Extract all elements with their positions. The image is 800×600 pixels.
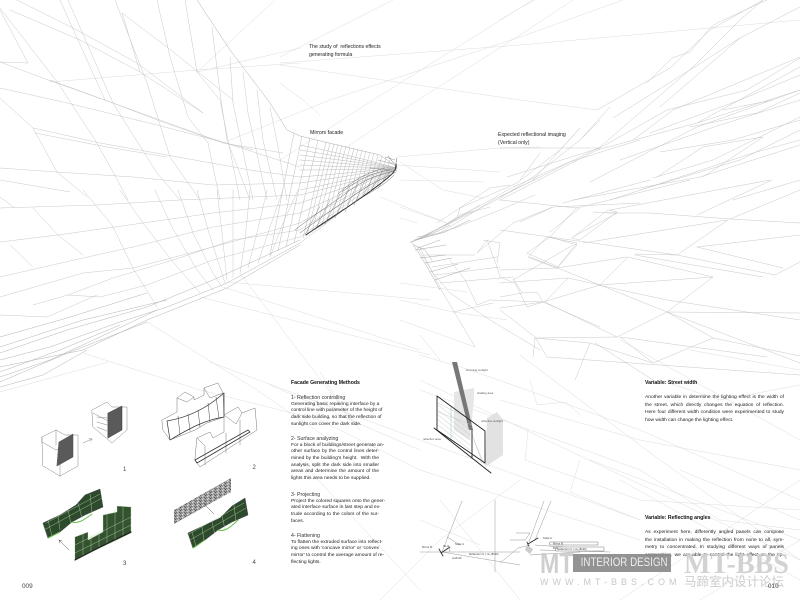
label: expected imaging: (Vertical only) xyxy=(498,140,529,146)
text: reflecting angles: the installation in making the reflection from none to all, sym- xyxy=(645,538,784,543)
heading: facade generating methods: Facade Generating Methods xyxy=(291,380,360,386)
reflecting angle diagram: 90-A xyxy=(443,544,449,548)
reflecting angle diagram: Reflection C = A+(B-90) xyxy=(469,552,499,556)
text: step 3 xyxy=(291,498,386,524)
text: step 4 xyxy=(291,540,384,565)
text: reflecting angles xyxy=(645,530,784,566)
reflecting angle diagram xyxy=(420,500,610,572)
text: step 1 xyxy=(291,402,382,427)
reflecting angle diagram: Solar A xyxy=(455,542,464,546)
text: reflecting angles: composition, we are able to control the light effect on the op- xyxy=(645,553,784,558)
watermark: 马蹄室内设计论坛 xyxy=(684,575,784,589)
text: step 2: areas and determine the amount of the xyxy=(291,469,379,474)
text: street width: Here four different width condition were experimented to study xyxy=(645,410,784,415)
text: step 4: ing ones with 'concave mirror' or 'convex xyxy=(291,546,379,551)
label: study formula xyxy=(309,44,381,58)
diagram 3: projected colours xyxy=(43,489,131,560)
text: step 1: dark side building, so that the reflection of xyxy=(291,415,382,420)
text: reflecting angles: As experiment here, differently angled panels can compose xyxy=(645,530,784,535)
text: reflecting angles: posite side. xyxy=(645,561,670,566)
subheading: step 1: 1- Reflection controlling xyxy=(291,395,345,401)
watermark: MT xyxy=(540,548,574,580)
text: street width: the street, which directly changes the equation of reflection. xyxy=(645,403,784,408)
heading: variable street width: Variable: Street width xyxy=(645,380,697,386)
text: step 2: For a block of buildings/street generate an- xyxy=(291,443,384,448)
text: step 1: Generating basic repairing interface by a xyxy=(291,402,379,407)
diagram 2: surface analyzing xyxy=(162,383,257,467)
text: step 1: control line with parameter of the height of xyxy=(291,408,382,413)
label: study formula: The study of reflections effects xyxy=(309,44,381,50)
text: step 3: trude according to the colors of the sur- xyxy=(291,512,379,517)
street width diagram: incoming sunlight xyxy=(466,368,488,372)
reflecting angle diagram: A+B-90 xyxy=(452,556,462,560)
label: study formula: generating formula xyxy=(309,52,352,58)
text: step 2 xyxy=(291,442,384,481)
reflecting angle diagram: Mirror B xyxy=(422,545,432,549)
text: step 4: flecting lights. xyxy=(291,560,321,565)
text: street width: Another variable in determine the lighting effect is the width of xyxy=(645,395,784,400)
text: reflecting angles: metry to concentrated. In studying different ways of panels xyxy=(645,545,784,550)
subheading: step 3: 3- Projecting xyxy=(291,492,320,498)
label: expected imaging xyxy=(498,132,566,146)
left mesh: mirrors facade xyxy=(0,0,397,387)
diagram 1: sun and dark side xyxy=(42,402,127,476)
reflecting angle diagram: B-C xyxy=(553,546,558,550)
right mesh: expected reflection xyxy=(410,0,800,380)
page number 010: 010 xyxy=(768,583,779,590)
text: step 2: analysis, split the dark side into smaller xyxy=(291,463,379,468)
text: step 2: lights this area needs to be supplied. xyxy=(291,476,371,481)
label 2: 2 xyxy=(252,465,256,471)
watermark: MT-BBS xyxy=(684,549,789,580)
heading: variable reflecting angles: Variable: Reflecting angles xyxy=(645,515,710,521)
label: expected imaging: Expected reflectional imaging xyxy=(498,132,566,138)
subheading: step 2: 2- Surface analyzing xyxy=(291,436,338,442)
label 1: 1 xyxy=(123,467,127,473)
street width diagram xyxy=(423,362,503,473)
text: street width: how width can change the lighting effect. xyxy=(645,418,733,423)
watermark: INTERIOR DESIGN xyxy=(581,557,668,569)
text: step 3: Project the colored squares onto the gener- xyxy=(291,499,385,504)
street width diagram: reflection area xyxy=(423,437,441,441)
watermark xyxy=(540,548,789,589)
diagram 4: flattening xyxy=(174,478,248,548)
text: step 4: To flatten the extruded surface into reflect- xyxy=(291,540,383,545)
street width diagram: shading area xyxy=(477,391,494,395)
text: step 4: mirror' to control the average amount of re- xyxy=(291,553,384,558)
text: step 2: other surface by the control lines deter- xyxy=(291,449,379,454)
label 4: 4 xyxy=(252,560,256,566)
subheading: step 4: 4- Flattening xyxy=(291,533,320,539)
text: step 3: faces. xyxy=(291,519,304,524)
label: mirrors facade: Mirrors facade xyxy=(310,130,343,136)
reflecting angle diagram: Reflection C = A+(B-90) xyxy=(557,547,587,551)
label 3: 3 xyxy=(123,561,127,567)
street width diagram: reflective sunlight xyxy=(481,419,503,423)
text: step 3: ated interface surface in last step and ex- xyxy=(291,505,381,510)
left mesh dark fold xyxy=(295,156,397,235)
text: step 2: mined by the building's height. With the xyxy=(291,456,379,461)
page number 009: 009 xyxy=(22,583,33,590)
reflecting angle diagram: Solar A xyxy=(543,536,552,540)
watermark: WWW.MT-BBS.COM xyxy=(540,577,680,587)
reflecting angle diagram: Mirror B xyxy=(553,542,563,546)
text: step 1: sunlight con cover the dark side. xyxy=(291,422,361,427)
text: street width xyxy=(645,394,784,423)
